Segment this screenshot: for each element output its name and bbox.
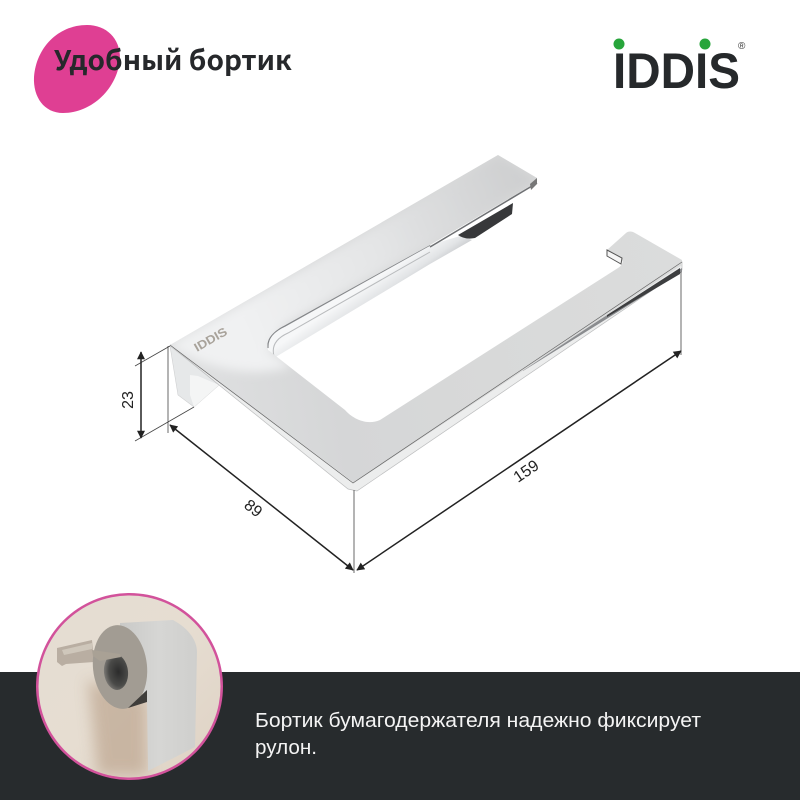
front lip	[170, 262, 682, 491]
wall mount block	[170, 346, 219, 407]
engraved logo: IDDIS	[192, 324, 230, 355]
notch hook	[607, 250, 622, 264]
outer edge shading	[170, 262, 682, 483]
roll end	[92, 625, 148, 709]
dimension: depth 89	[170, 425, 353, 570]
dimension: length 159	[354, 272, 681, 573]
dimension: length 159: 159	[511, 457, 542, 486]
caption: рулон.	[255, 737, 317, 759]
paper sheet	[120, 620, 197, 771]
logo: IDDIS: ®	[738, 41, 746, 52]
caption	[255, 710, 701, 759]
inner chrome side of upper arm	[267, 236, 472, 358]
heading: Удобный бортик	[54, 39, 293, 78]
product: chrome paper holder	[170, 155, 682, 491]
shadow on wall	[88, 680, 147, 775]
top face	[170, 155, 682, 483]
caption: Бортик бумагодержателя надежно фиксирует	[255, 710, 701, 732]
logo: IDDIS: IDDIS	[613, 43, 740, 99]
roll core	[104, 656, 128, 690]
dark mount under upper arm	[458, 203, 513, 239]
footer band	[0, 672, 800, 800]
bracket tip	[92, 650, 121, 661]
photo: paper roll on holder	[36, 593, 223, 780]
heading badge: pink blob	[34, 25, 120, 113]
dimension: depth 89: 89	[241, 497, 265, 521]
dimension: height 23	[120, 346, 194, 441]
bracket	[57, 640, 94, 666]
dimension: height 23: 23	[120, 391, 137, 409]
tip of upper arm	[530, 178, 537, 190]
